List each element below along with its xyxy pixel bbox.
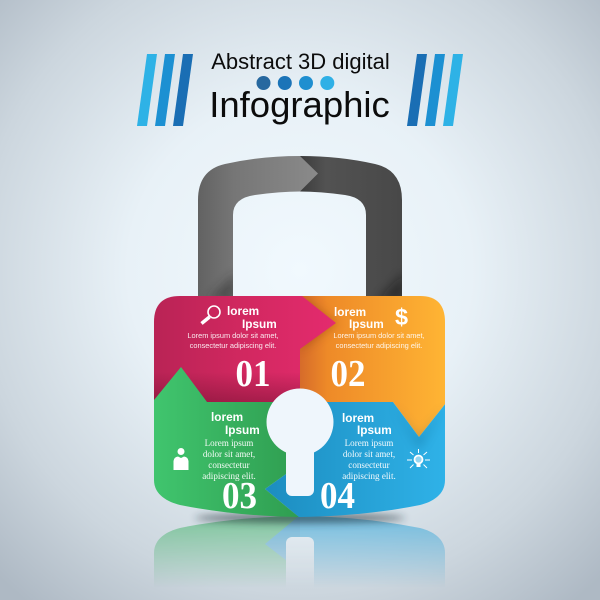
panel 04 text: adipiscing elit. [342,471,396,481]
panel 04 text: Ipsum [357,423,392,437]
icon: businessman [174,448,188,470]
panel 03 text: 03 [222,475,257,517]
title: Infographic: Infographic [209,84,390,125]
panel 02 text [330,305,425,395]
panel 03 text: Ipsum [225,423,260,437]
ground shadow [195,513,405,523]
panel 04 text: 04 [320,475,355,517]
panel 04 text: dolor sit amet, [343,449,395,459]
icon: light bulb [407,449,430,468]
magenta arrow shadow on orange [300,296,338,350]
panel 03 text: adipiscing elit. [202,471,256,481]
panel 04 text [320,411,396,517]
panel 03 green [150,367,300,520]
panel 04 text: Lorem ipsum [345,438,393,448]
panel 04 blue [265,400,450,522]
title dots [256,76,334,90]
panel 03 text: lorem [211,410,243,424]
panel 01 text: Ipsum [242,317,277,331]
orange tip shadow on blue [404,416,436,446]
shackle [198,156,405,300]
icon: magnifier [202,306,220,324]
panel 01 text: consectetur adipiscing elit. [190,341,276,350]
icon: dollar: $ [395,304,408,330]
panel 04 text: consectetur [348,460,390,470]
panel 03 text: Lorem ipsum [205,438,253,448]
panel 02 text: lorem [334,305,366,319]
panel 01 text: lorem [227,304,259,318]
right stripes [407,54,463,126]
panel 02 text: Lorem ipsum dolor sit amet, [333,331,425,340]
panel 02 orange [298,290,450,437]
left stripes [137,54,193,126]
keyhole [266,388,334,496]
shackle left half arrow [198,156,318,296]
panel 02 text: consectetur adipiscing elit. [336,341,422,350]
panel 03 text: dolor sit amet, [203,449,255,459]
panel 03 text: consectetur [208,460,250,470]
reflection [154,516,445,582]
shackle right half [300,156,402,296]
panel 01 text: 01 [236,353,270,395]
panel 04 text: lorem [342,411,374,425]
panel 03 text [202,410,260,517]
panel 01 magenta [150,290,336,405]
panel 01 text [187,304,279,395]
lock body [150,290,450,522]
panel 01 text: Lorem ipsum dolor sit amet, [187,331,279,340]
title: Abstract 3D digital: Abstract 3D digital [211,49,390,74]
panel 02 text: Ipsum [349,317,384,331]
panel 02 text: 02 [330,353,366,395]
